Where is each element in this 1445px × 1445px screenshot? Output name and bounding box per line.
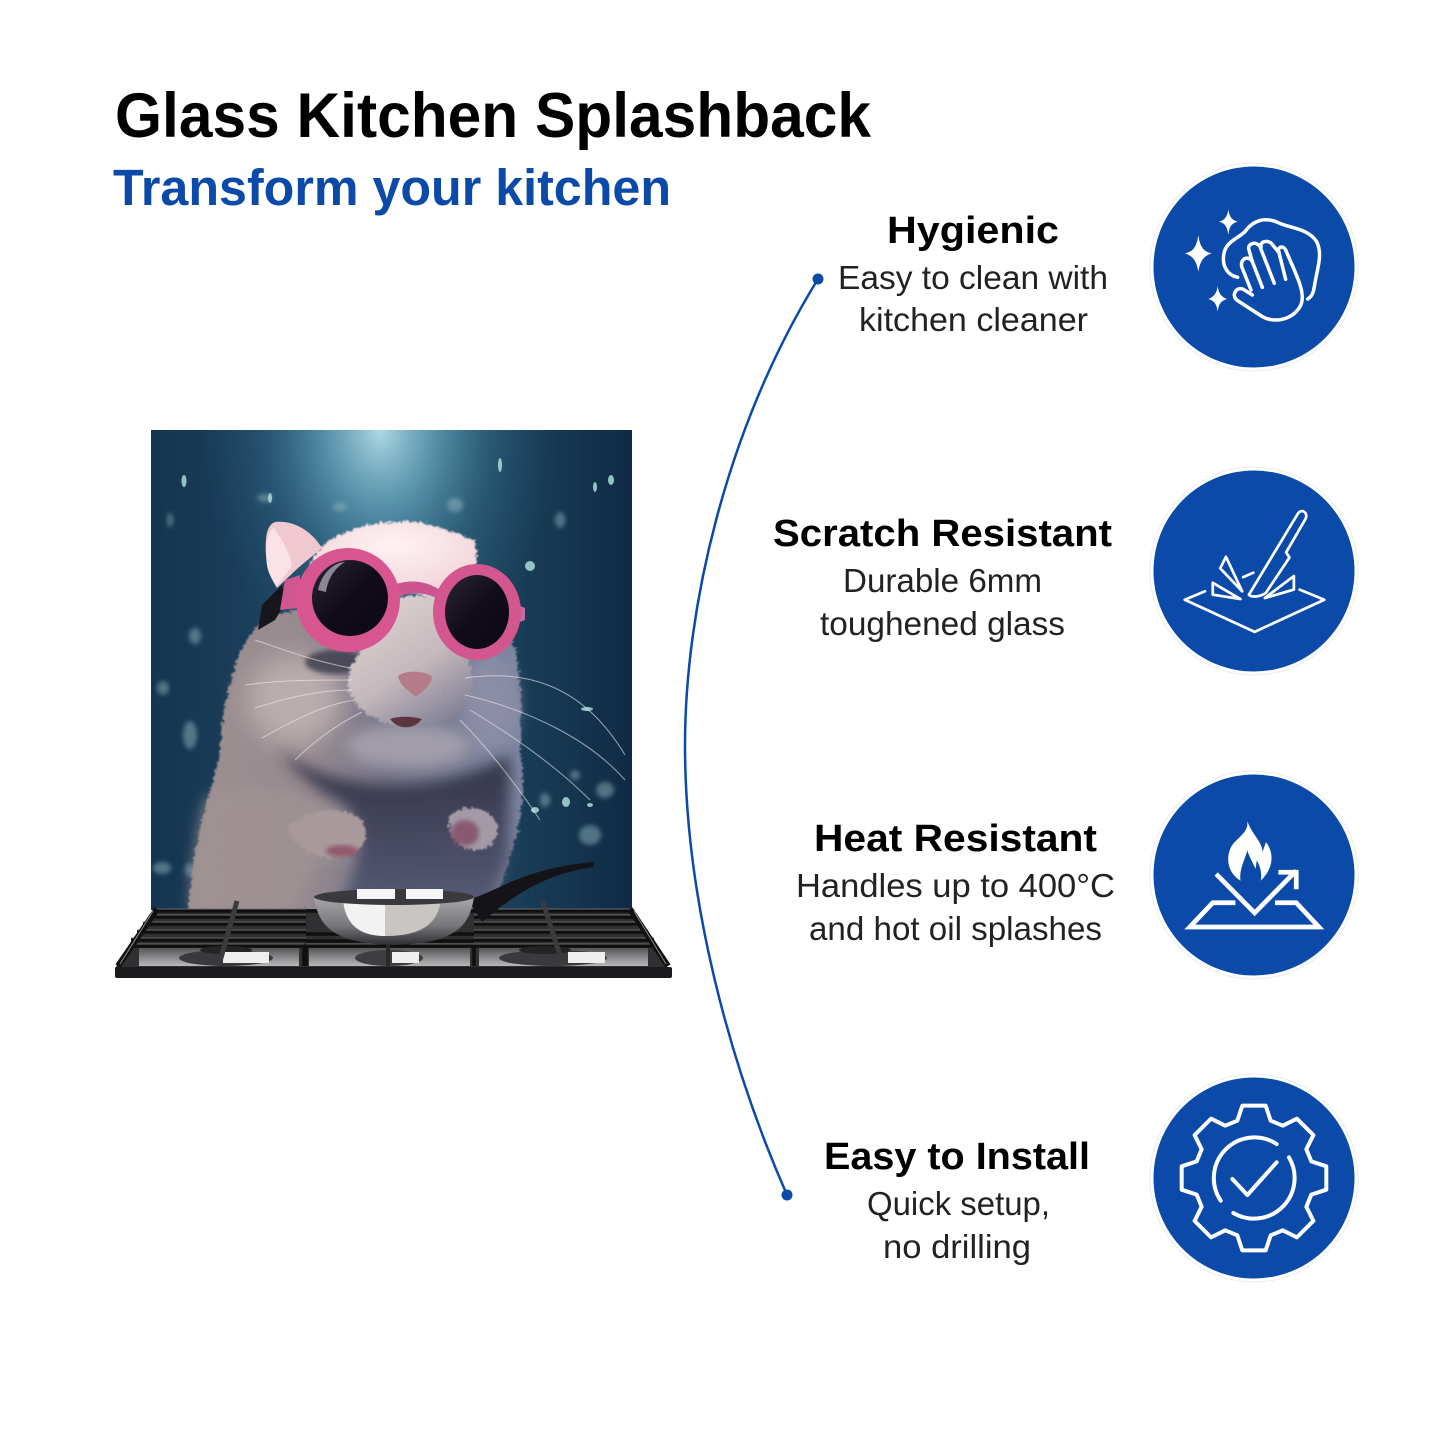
subtitle: Transform your kitchen — [113, 159, 671, 216]
feature text: hygienic — [838, 210, 1108, 338]
icon: hand wiping with sparkles — [1150, 163, 1358, 371]
nose — [398, 672, 432, 697]
feature text: easy to install: Easy to Install — [824, 1136, 1090, 1178]
snout — [348, 596, 472, 727]
feature text: heat resistant: Handles up to 400°C — [796, 867, 1115, 904]
feature text: heat resistant: and hot oil splashes — [809, 910, 1102, 947]
feature text: hygienic: kitchen cleaner — [859, 301, 1088, 338]
feature text: scratch resistant: Scratch Resistant — [773, 513, 1112, 555]
icon: gear with check mark — [1150, 1074, 1358, 1282]
feature text: hygienic: Hygienic — [887, 210, 1059, 252]
left paw — [288, 811, 366, 858]
right paw — [449, 808, 498, 850]
ear — [266, 522, 322, 588]
feature text: scratch resistant: Durable 6mm — [843, 562, 1042, 599]
infographic canvas — [114, 91, 1358, 1282]
burners — [179, 950, 273, 966]
right cheek — [462, 655, 518, 755]
feature text: easy to install: Quick setup, — [867, 1185, 1050, 1222]
whiskers — [245, 640, 625, 820]
splashback panel with hamster artwork — [151, 430, 632, 910]
dark chest band and belly — [280, 750, 510, 910]
shoulder and flank fur — [182, 788, 343, 908]
product image: splashback with hamster above gas hob — [115, 430, 672, 978]
hamster body — [187, 521, 625, 910]
icon: knife scratching glass — [1150, 467, 1358, 675]
left cheek — [247, 655, 343, 745]
head crown — [308, 521, 478, 600]
frying pan — [314, 862, 594, 945]
feature text: hygienic: Easy to clean with — [838, 259, 1108, 296]
feature text: easy to install — [824, 1136, 1090, 1265]
sunglasses — [258, 548, 525, 660]
feature text: scratch resistant: toughened glass — [820, 605, 1065, 642]
title: Glass Kitchen Splashback — [115, 81, 872, 151]
gas hob with grates and burners — [115, 901, 672, 978]
feature text: scratch resistant — [773, 513, 1112, 642]
mouth — [390, 717, 422, 727]
connector curve with end dots — [685, 274, 824, 1200]
icon: flame reflected from surface — [1150, 771, 1358, 979]
muzzle underside — [346, 724, 470, 768]
dark patch under left lens — [305, 650, 365, 674]
feature text: heat resistant — [796, 818, 1115, 947]
feature text: easy to install: no drilling — [883, 1228, 1031, 1265]
feature text: heat resistant: Heat Resistant — [814, 818, 1097, 860]
